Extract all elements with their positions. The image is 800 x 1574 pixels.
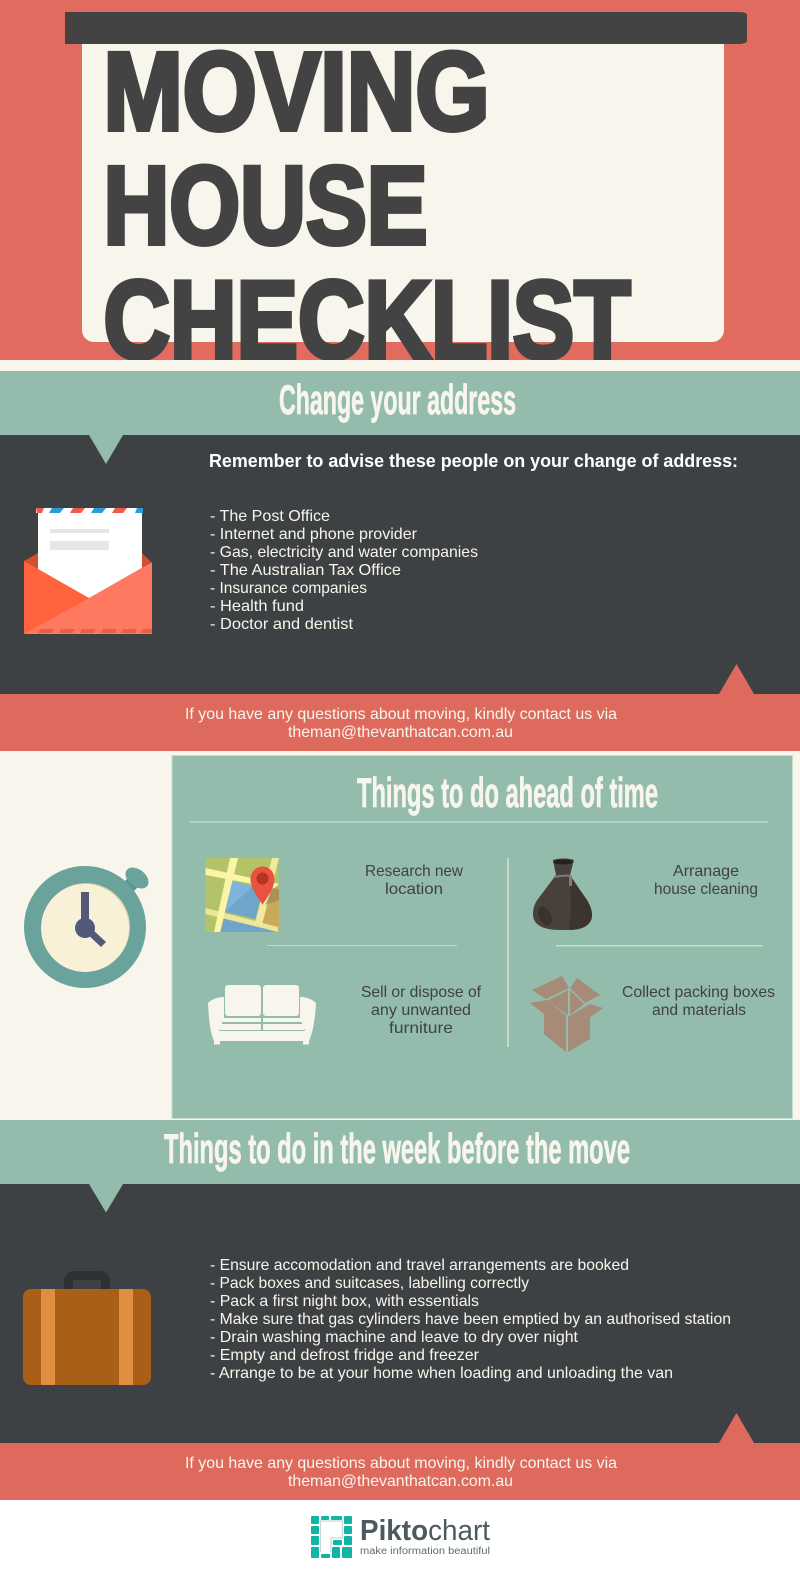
- panel: things to do ahead of time: [172, 756, 792, 1118]
- text: sell or dispose: Sell or dispose of: [361, 984, 482, 1001]
- panel: contact banner one: [0, 694, 800, 751]
- text: arrange house cleaning: Arranage: [673, 863, 739, 880]
- title: HOUSE: [104, 144, 428, 268]
- list: people to advise: - Internet and phone provider: [210, 526, 418, 543]
- list: week before tasks: - Pack a first night box, with essentials: [210, 1293, 479, 1310]
- text: arrange house cleaning: [654, 863, 758, 898]
- list: people to advise: - Gas, electricity and water companies: [210, 544, 478, 561]
- text: collect packing boxes: and materials: [652, 1002, 746, 1019]
- text: research new location: [365, 863, 463, 898]
- list: people to advise: - Doctor and dentist: [210, 616, 354, 633]
- text: advise intro: Remember to advise these people on your change of address:: [209, 451, 738, 471]
- text: collect packing boxes: [622, 984, 775, 1019]
- text: sell or dispose: furniture: [389, 1020, 453, 1037]
- text: sell or dispose: [361, 984, 482, 1037]
- heading: change your address: Change your address: [279, 376, 516, 423]
- list: people to advise: - Health fund: [210, 598, 304, 615]
- list: people to advise: - The Australian Tax Office: [210, 562, 401, 579]
- panel: contact banner two: theman@thevanthatcan.com.au: [288, 1473, 513, 1490]
- logo: Piktochart: [311, 1515, 490, 1558]
- text: research new location: Research new: [365, 863, 463, 880]
- list: people to advise: - Insurance companies: [210, 580, 367, 597]
- list: week before tasks: - Make sure that gas cylinders have been emptied by an authorised station: [210, 1311, 731, 1328]
- icon: stopwatch: [24, 863, 152, 988]
- panel: contact banner two: If you have any questions about moving, kindly contact us via: [185, 1455, 617, 1472]
- title: MOVING: [104, 30, 490, 154]
- logo tagline: make information beautiful: [360, 1546, 490, 1557]
- list: week before tasks: [210, 1257, 731, 1382]
- text: research new location: location: [385, 881, 443, 898]
- panel: contact banner one: If you have any questions about moving, kindly contact us via: [185, 706, 617, 723]
- icon: envelope: [24, 508, 152, 634]
- panel: contact banner one: theman@thevanthatcan.com.au: [288, 724, 513, 741]
- list: week before tasks: - Drain washing machine and leave to dry over night: [210, 1329, 579, 1346]
- icon: Piktochart mark: [311, 1516, 352, 1558]
- icon: suitcase: [23, 1276, 151, 1385]
- text: sell or dispose: any unwanted: [371, 1002, 471, 1019]
- panel: contact banner two: [0, 1443, 800, 1500]
- list: people to advise: - The Post Office: [210, 508, 330, 525]
- title: [105, 50, 632, 360]
- list: week before tasks: - Empty and defrost fridge and freezer: [210, 1347, 480, 1364]
- icon: sofa: [208, 985, 316, 1044]
- logo wordmark: Piktochart: [360, 1515, 490, 1547]
- list: week before tasks: - Pack boxes and suitcases, labelling correctly: [210, 1275, 529, 1292]
- title: CHECKLIST: [104, 259, 630, 382]
- panel: week before the move: [0, 1120, 800, 1443]
- list: people to advise: [210, 508, 478, 633]
- text: arrange house cleaning: house cleaning: [654, 881, 758, 898]
- list: week before tasks: - Ensure accomodation and travel arrangements are booked: [210, 1257, 629, 1274]
- text: collect packing boxes: Collect packing boxes: [622, 984, 775, 1001]
- icon: map: [206, 858, 279, 932]
- icon: rubbish bag: [533, 858, 592, 930]
- panel: change your address: [0, 371, 800, 694]
- icon: cardboard box: [530, 976, 603, 1052]
- panel: header: [0, 0, 800, 382]
- list: week before tasks: - Arrange to be at your home when loading and unloading the van: [210, 1365, 673, 1382]
